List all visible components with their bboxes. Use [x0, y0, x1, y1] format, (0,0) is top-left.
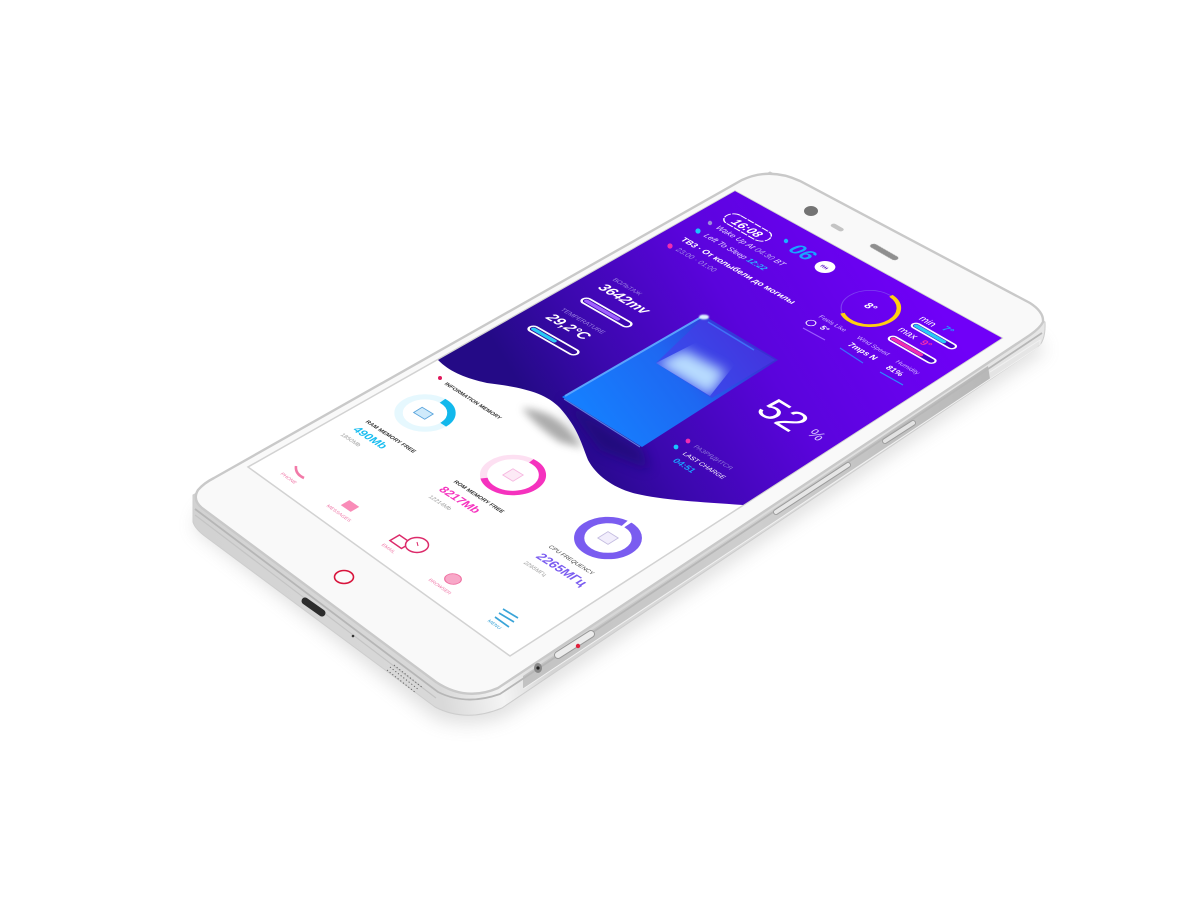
alarm info lines: Left To Sleep 12:22 — [701, 232, 770, 272]
feels like — [803, 314, 848, 340]
wind speed — [840, 335, 891, 363]
ROM text: 8217Mb — [435, 484, 484, 515]
side panel — [523, 366, 990, 689]
min temperature — [910, 315, 958, 350]
battery percentage: 52 — [746, 394, 818, 438]
alarm info lines: Wake Up At 04:30 BT — [713, 224, 789, 268]
weekday badge: пн — [818, 264, 830, 271]
alarm info lines — [667, 221, 799, 305]
CPU text: 2265МГц — [521, 561, 548, 578]
icon: memory chip — [414, 407, 433, 419]
phone shadow — [194, 335, 1046, 724]
nav: menu: MENU — [485, 619, 503, 631]
USB port — [305, 601, 322, 613]
icon: globe — [441, 572, 465, 586]
speaker grille — [387, 665, 423, 693]
wind speed: 7mps N — [845, 341, 881, 361]
temperature stat: 29,2°C — [541, 311, 594, 342]
memory heading: INFORMATION MEMORY — [442, 382, 503, 421]
feels like: 5° — [817, 324, 832, 333]
humidity: Humidity — [893, 359, 922, 376]
charge info: РАЗРЯДИТСЯ — [691, 444, 734, 471]
upper empty part — [656, 318, 775, 398]
icon: storage — [503, 469, 523, 481]
wind speed: Wind Speed — [854, 335, 891, 357]
side walls — [193, 172, 1045, 715]
ROM text: ROM MEMORY FREE — [451, 480, 505, 514]
charge info: LAST CHARGE — [680, 451, 727, 481]
bottom edge highlight — [564, 399, 640, 447]
nav: menu — [485, 609, 518, 631]
camera — [804, 206, 818, 216]
ROM text: 12214Mb — [426, 495, 453, 512]
nav: messages: MESSAGES — [324, 504, 353, 523]
time pill — [720, 212, 775, 244]
min temperature: 7° — [938, 325, 956, 335]
CPU text: 2265МГц — [532, 551, 592, 588]
icon: handset — [296, 466, 304, 478]
max temperature: 9° — [916, 339, 934, 349]
volume button — [776, 465, 848, 512]
battery shadow — [562, 399, 650, 470]
ROM ring — [471, 450, 555, 500]
second chamfer line — [195, 515, 436, 698]
nav: messages — [324, 500, 359, 523]
TV programme line: ТВ3 · От колыбели до могилы — [678, 236, 799, 305]
nav: browser: BROWSER — [426, 578, 453, 596]
weekday badge — [810, 258, 840, 276]
CPU text: CPU FREQUENCY — [546, 545, 595, 576]
RAM text: 1850Mb — [338, 433, 362, 448]
icon: envelope — [390, 535, 411, 548]
temperature stat — [527, 307, 607, 356]
icon: cpu — [598, 532, 618, 544]
CPU text — [521, 545, 595, 588]
RAM text — [338, 420, 417, 454]
power button — [885, 423, 913, 441]
temperature stat: TEMPERATURE — [558, 307, 607, 336]
RAM text: RAM MEMORY FREE — [363, 420, 417, 454]
right inner edge — [708, 322, 754, 350]
wave shadow — [522, 408, 582, 448]
alarm info lines: 23:00 · 01:00 — [673, 246, 719, 273]
charge info: 04:51 — [670, 457, 698, 474]
microphone hole — [352, 635, 354, 637]
RAM text: 490Mb — [349, 425, 390, 451]
sleep line — [695, 228, 701, 234]
nav: phone — [278, 466, 304, 486]
TV time line — [667, 243, 673, 249]
time pill: 16:08 — [728, 217, 767, 239]
feels like: Feels Like — [816, 314, 848, 333]
nav: browser — [426, 572, 465, 596]
SIM tray button — [558, 634, 591, 655]
cap glint — [699, 315, 709, 319]
side highlight — [523, 340, 1040, 689]
nav: email with clock — [379, 535, 428, 555]
front face — [196, 174, 1043, 694]
headphone jack — [534, 663, 542, 673]
humidity — [880, 359, 922, 385]
min temperature: min — [915, 315, 939, 329]
light glow — [656, 350, 726, 396]
earpiece speaker — [869, 243, 900, 261]
nav: phone: PHONE — [278, 472, 299, 486]
weather temperature ring — [829, 283, 911, 333]
humidity: 81% — [883, 364, 907, 378]
nav: email with clock: EMAIL — [379, 543, 397, 555]
chamfer line — [195, 333, 1042, 700]
proximity sensor — [829, 223, 845, 232]
RAM ring — [388, 390, 462, 436]
battery percentage: % — [803, 427, 829, 443]
weather temperature ring: 8° — [860, 301, 880, 313]
charge info — [670, 439, 734, 481]
icon: menu lines — [495, 609, 518, 627]
battery body — [562, 315, 778, 447]
icon: clock — [406, 538, 428, 552]
date number: 06 — [783, 241, 822, 264]
battery illustration — [562, 315, 778, 470]
ROM text — [426, 480, 505, 515]
purple battery panel — [438, 191, 1002, 505]
purple wave background — [438, 191, 1002, 505]
home button — [334, 570, 354, 584]
phone body — [193, 172, 1045, 715]
icon: message — [341, 500, 359, 512]
voltage stat — [580, 277, 654, 328]
screen — [248, 191, 1002, 656]
voltage stat: 3642mv — [594, 282, 654, 317]
max temperature — [887, 326, 937, 364]
edge highlight — [565, 316, 703, 396]
voltage stat: ВОЛЬТАЖ — [610, 277, 643, 297]
wake up line — [708, 221, 712, 225]
max temperature: max — [894, 326, 920, 341]
CPU ring — [567, 513, 649, 563]
